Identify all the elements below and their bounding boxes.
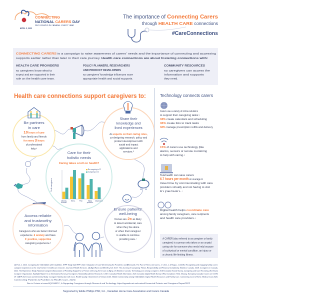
- text: digital health: and health care providers.⁸: [160, 216, 196, 220]
- column: health care providers: so caregivers know what to: [16, 68, 53, 72]
- text: digital health: Digital health helps coordinate care: [160, 209, 210, 212]
- column: community resources: information and supports: [164, 72, 205, 76]
- circle: share knowledge: Share their: [120, 117, 138, 121]
- column: health care providers: expect and are supported in their: [16, 72, 55, 76]
- references: caregiver experience as the new frontier in healthcare research. Journal of Health Services. (3) Age Wave and Merrill Lynch 2017. The Journey of Caregiving: Honor, Responsibility and Financial Complexity. Statistics Canada. 2018. Caregivers in Canada.: [14, 266, 218, 270]
- column: community resources: COMMUNITY RESOURCES: [164, 64, 205, 68]
- logo: Connecting National Carers Day: [15, 10, 81, 30]
- circle: share knowledge: social and impact: [119, 144, 138, 146]
- circle: ensure patients' well-being: to detect accidental, care: [114, 222, 143, 225]
- icon: computer mouse: [14, 183, 23, 189]
- text: digital health: among family caregivers, care recipients: [160, 213, 210, 216]
- logo: Connecting National Carers Day: NATIONAL CARERS DAY: [35, 20, 81, 24]
- icon: smiling face: [123, 195, 131, 202]
- column: community resources: so caregivers can access the: [164, 68, 211, 72]
- circle: share knowledge: knowledge and: [116, 122, 141, 126]
- circle: care for their holistic needs: Care for their: [67, 150, 91, 155]
- icon: small circle: [25, 161, 31, 167]
- column: health care providers: HEALTH CARE PROVIDERS: [16, 64, 59, 68]
- text: telehealth: in person.⁷: [160, 189, 183, 193]
- circle: be partners in care: from family and friends: [21, 136, 47, 138]
- column: policy planners: POLICY PLANNERS, RESEARCHERS: [83, 64, 130, 68]
- circle: be partners in care: 10 hours of care: [24, 130, 45, 134]
- circle: access reliable information: information: [28, 222, 48, 228]
- circle: ensure patients' well-being: or when their caregiver: [115, 230, 141, 233]
- bar chart: health effects of caregiving: Caregiving in 12: [88, 171, 99, 174]
- icon: laptop: [160, 164, 173, 173]
- bar chart: health effects of caregiving: Depression: [95, 200, 103, 202]
- bar chart: health effects of caregiving: Sleep: [88, 200, 92, 202]
- circle: share knowledge: co-designing research, policy and: [110, 136, 148, 140]
- column: health care providers: role on the health care team.: [16, 76, 55, 80]
- column: policy planners: appropriate health and social supports.: [83, 76, 133, 80]
- circle: be partners in care: help.¹: [31, 148, 37, 150]
- logo: Connecting National Carers Day: RECOGNIZED IN CANADA · EVERY YEAR: [35, 24, 75, 27]
- panel: campaign introduction: CONNECTING CARERS is a campaign to raise awareness of carers' needs and the importance of connecting and accessing: [16, 52, 217, 56]
- circle: ensure patients' well-being: Nurses are 2x as likely: [115, 216, 142, 221]
- text: telehealth: [160, 174, 214, 193]
- circle: ensure patients' well-being: providing care.⁴: [119, 237, 137, 241]
- circle: be partners in care: of professional: [26, 144, 43, 146]
- circle: care for their holistic needs: holistic needs: [67, 155, 91, 160]
- text: telehealth: 6.7 hours per month on average in: [160, 177, 204, 181]
- bar chart: health effects of caregiving: % of caregivers: [51, 178, 53, 192]
- circle: be partners in care: Be partners: [24, 120, 44, 125]
- circle: access reliable information: and trustworthy: [24, 218, 52, 223]
- circle: ensure patients' well-being: [104, 206, 152, 252]
- icon: book: [31, 202, 46, 210]
- bar chart: health effects of caregiving: Anxiety: [62, 200, 67, 202]
- column: community resources: [164, 64, 211, 80]
- text: online solutions: 33% manage prescription refills and delivery: [160, 126, 214, 129]
- text: online solutions: Carers use a variety of online solutions: [160, 110, 199, 113]
- text: technology monitoring: [160, 146, 208, 157]
- text: digital health: [160, 209, 210, 220]
- divider: [153, 88, 156, 258]
- text: technology monitoring: 15% of carers use technology (like: [160, 146, 205, 149]
- text: telehealth: travel time by communicating with care: [160, 182, 214, 185]
- panel: campaign introduction: supports earlier rather than later in their care journey. Health care connections are about fostering connections with:: [16, 56, 208, 60]
- panel: technology connects carers: [158, 93, 214, 220]
- icon: house with family: [28, 108, 40, 118]
- bar chart: health effects of caregiving: [51, 168, 103, 204]
- column: policy planners: [83, 64, 134, 80]
- bar chart: health effects of caregiving: disorder: [61, 201, 67, 204]
- icon: piggy bank: [138, 178, 149, 190]
- title: through HEALTH CARE connections: [142, 21, 219, 27]
- references: See in Ontario at www.HQO.HMCC, Is Supporting Caregivers through Research and Technology. https://ageweb.net.au/content/Connected Patients and Caregivers Report/2022: [27, 282, 191, 285]
- circle: access reliable information: experience ⬇ anxiety and have: [20, 233, 56, 237]
- title: The importance of Connecting Carers: [123, 14, 218, 20]
- footer rule: [13, 285, 218, 288]
- panel: campaign introduction: [13, 48, 218, 85]
- circle: ensure patients' well-being: well-being: [119, 211, 137, 216]
- icon: stethoscope: [128, 27, 186, 42]
- circle: share knowledge: applications and: [119, 147, 138, 150]
- circle: share knowledge: [102, 108, 154, 160]
- circle: access reliable information: caregiving experience.³: [25, 242, 51, 245]
- circle: access reliable information: ⬆ positive, supportive: [25, 237, 52, 241]
- circle: access reliable information: Caregivers who are better informed: [19, 230, 58, 233]
- footer: supporters: Supported by Eddie Phillips PhD, Inc., Canadian Home Care Association and Carers Canada: [63, 289, 169, 293]
- text: technology monitoring: to help with caring.⁶: [160, 153, 185, 157]
- column: health care providers: [16, 64, 59, 80]
- circle: share knowledge: services.²: [123, 150, 134, 154]
- logo: Connecting National Carers Day: APRIL 5, 2022: [20, 27, 32, 30]
- callout: carer definition: of a physical or mental condition, an injury or: [162, 250, 212, 252]
- icon: wifi: [160, 138, 168, 145]
- text: online solutions: 33% create calendars and scheduling: [160, 118, 208, 121]
- panel: technology connects carers: Technology connects carers: [160, 93, 213, 98]
- icon: two people holding hands: [74, 232, 102, 257]
- circle: be partners in care: for every 3 hours: [23, 138, 45, 142]
- column: community resources: they need.: [164, 76, 178, 80]
- column: policy planners: AND PRODUCT DEVELOPERS: [83, 68, 121, 72]
- references: 19: CARP 2021 Care and Dementia Study: Caregiver Satisfaction with Care. Health Quality. Government of Ontario 2021. Mobile Connectivity among Older Adults: Digital Health Resources and Family Care. Connecting Care to Home. Medical Care 2020.: [14, 276, 218, 278]
- bar chart: health effects of caregiving: Pain: [79, 200, 83, 202]
- callout: carer definition: caring role for someone who needs help because: [162, 246, 214, 248]
- circle: be partners in care: [13, 114, 55, 156]
- bar chart: health effects of caregiving: Stress: [71, 200, 75, 202]
- circle: ensure patients' well-being: is unable to continue: [117, 234, 140, 237]
- callout: carer definition: caregiver) is a person who takes on an unpaid: [162, 242, 212, 244]
- bar chart: health effects of caregiving: No caregiving in 12: [88, 168, 101, 171]
- text: online solutions: [160, 110, 214, 129]
- circle: share knowledge: As experts on their caring roles,: [110, 133, 148, 136]
- references: [14, 264, 219, 285]
- callout: carer definition: a chronic life-limiting illness.: [162, 254, 194, 256]
- connector lines: [18, 122, 144, 240]
- circle: be partners in care: in care: [28, 125, 41, 130]
- title: #CareConnections: [172, 31, 218, 37]
- text: technology monitoring: alarms, sensors or remote monitoring: [160, 150, 208, 153]
- callout: carer definition: A CARER (also referred to as caregiver or family: [162, 238, 213, 240]
- circle: share knowledge: product development with: [114, 140, 143, 143]
- text: online solutions: 33% create lists to track tasks: [160, 122, 200, 125]
- icon: globe: [160, 102, 168, 109]
- heading: health care connections: Health care connections support caregivers to:: [14, 93, 146, 100]
- references: Connecting Patients & Families to Health Care, 2020.: [14, 278, 77, 282]
- callout: carer definition: [160, 234, 218, 258]
- icon: megaphone: [70, 125, 84, 139]
- circle: access reliable information: Access reliable: [25, 213, 52, 218]
- circle: share knowledge: lived experiences: [115, 126, 143, 130]
- text: telehealth: Telehealth can save carers: [160, 174, 195, 177]
- circle: ensure patients' well-being: when they live alone: [117, 226, 140, 229]
- circle: care for their holistic needs: Caring takes a toll on health?: [59, 161, 99, 165]
- bar chart: health effects of caregiving: problems: [87, 201, 93, 204]
- title: [123, 14, 219, 37]
- text: online solutions: to support their caregiving tasks:⁵: [160, 113, 200, 117]
- logo: Connecting National Carers Day: CONNECTING: [35, 16, 60, 20]
- circle: care for their holistic needs: [46, 144, 112, 210]
- icon: glasses: [158, 202, 171, 208]
- icon: light bulb: [124, 102, 132, 114]
- circle: ensure patients' well-being: Ensure patients': [114, 206, 143, 212]
- circle: access reliable information: [13, 204, 63, 254]
- text: telehealth: providers virtually and not having to visit: [160, 186, 210, 189]
- column: policy planners: so caregivers' knowledge influences more: [83, 72, 134, 76]
